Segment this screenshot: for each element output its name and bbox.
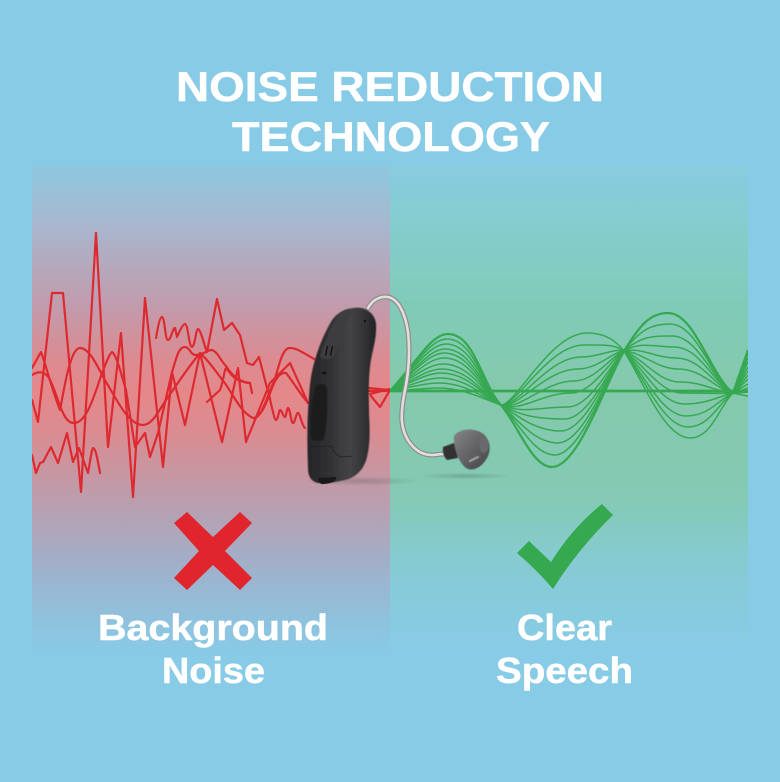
indicator dots	[322, 320, 366, 374]
title	[176, 63, 604, 160]
device body	[307, 308, 376, 483]
device shadow	[304, 476, 420, 486]
label: background noise: Background	[98, 607, 328, 648]
ear tip shadow	[417, 472, 513, 480]
label: clear speech: Speech	[496, 650, 633, 691]
ear tip	[443, 430, 490, 470]
infographic canvas	[32, 72, 748, 691]
title: TECHNOLOGY	[232, 113, 550, 160]
chart: clear green waveform	[390, 313, 748, 467]
microphone slits	[326, 346, 332, 356]
connecting tube	[368, 297, 444, 455]
label: clear speech	[496, 607, 633, 691]
label: background noise	[98, 607, 328, 691]
panel: background noise	[32, 165, 390, 655]
icon: green check	[517, 504, 613, 589]
battery door seam	[309, 446, 353, 457]
hearing aid	[304, 297, 513, 486]
icon: red cross	[174, 512, 252, 590]
label: clear speech: Clear	[517, 607, 612, 648]
bottom foot	[318, 477, 336, 484]
title: NOISE REDUCTION	[176, 63, 604, 110]
top cover	[320, 310, 352, 359]
side button	[311, 384, 327, 441]
panel: clear speech	[390, 165, 748, 655]
chart: noisy red waveform	[32, 233, 390, 497]
label: background noise: Noise	[162, 650, 265, 691]
